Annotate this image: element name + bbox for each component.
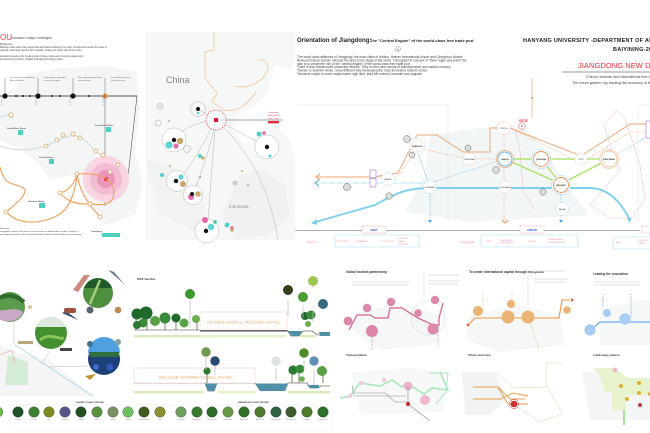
text block: description <box>297 55 467 76</box>
node: west hub <box>409 138 425 154</box>
legend: west: WEST <box>307 240 318 244</box>
timeline: Trading ports expanded <box>44 76 67 79</box>
plant labels: Arrowhead <box>139 418 149 421</box>
panel: development axis diagram: WEST <box>371 229 378 232</box>
other nodes: TUNCHANG <box>500 186 511 189</box>
legend: east: TOURISM <box>637 240 647 242</box>
axis line <box>295 230 640 232</box>
panel: development axis diagram <box>295 78 650 249</box>
photo: mangrove <box>35 317 67 349</box>
text block: intro: regional cooperation and the flow of goods, people and culture across the ocean <box>0 49 82 52</box>
plant labels: Lotus <box>32 418 36 421</box>
hub label: Jiangdong <box>268 112 279 114</box>
small clusters <box>155 103 249 232</box>
legend: east <box>613 237 650 249</box>
plant labels: Reed <box>111 419 115 421</box>
city node: east <box>255 131 279 159</box>
heading <box>297 37 474 44</box>
blue dashed routes <box>316 135 650 222</box>
legend: west: TRADE <box>398 240 406 243</box>
plant labels: Taro <box>158 418 162 421</box>
hotel box: SEASIDE INTERNATIONAL HOTEL <box>159 375 234 380</box>
heading: green: Landscape pattern <box>593 353 620 357</box>
plant labels: Aegiceras <box>240 418 248 421</box>
legend: west: INDUSTRY <box>337 241 349 243</box>
text block: footnote: Jiangdong connects the ports of the sea route to inland trade corridors, forming a <box>0 230 79 233</box>
text block: description: There is also transformed production factors. They run the new normal of transformation and capital currency. <box>297 65 451 69</box>
text block: intro: Maritime trade routes have linked Asia with Africa and Europe for many centuries and remain the basis of <box>0 46 107 49</box>
panel: urban analysis top <box>344 270 650 352</box>
label: China: China <box>166 75 190 85</box>
subtitle <box>572 75 650 85</box>
panel: development axis diagram: CENTER <box>527 229 537 232</box>
node: east hub c <box>600 150 618 168</box>
timeline: Free trade port policy <box>111 76 132 79</box>
legend: center <box>460 235 578 247</box>
node: east hub b <box>552 176 570 194</box>
green axes <box>505 159 609 184</box>
node: east hub a: QIONGHAI <box>536 158 546 161</box>
section: top <box>132 276 330 337</box>
purple gate <box>370 121 650 187</box>
arrowheads <box>311 174 632 225</box>
data callouts: South-East Route <box>95 124 114 127</box>
orange sea routes <box>0 167 114 222</box>
timeline: Sea route opened between <box>10 76 36 79</box>
map: orange <box>465 291 574 352</box>
plant labels: Xylocarpus <box>318 418 328 421</box>
legend: east: EAST <box>616 241 622 244</box>
legend: center: TRADE AND <box>500 239 513 242</box>
map: pink <box>344 296 445 350</box>
legend: west: LOGISTICS <box>382 241 394 243</box>
text block: description: Technical output to reach capital talent high land, lead the coast to innovate and upgrade. <box>297 72 423 76</box>
panel: maritime silk road map <box>0 33 143 237</box>
plant catalog heading <box>76 401 269 404</box>
panel: ecological habitat circles <box>0 270 332 430</box>
other nodes: SANYA <box>559 208 566 211</box>
hub label: Free Trade <box>268 117 279 120</box>
map: blue <box>584 294 650 345</box>
heading: panel title <box>0 33 52 42</box>
site pointer <box>519 78 533 129</box>
photo: coast wetland <box>0 292 25 322</box>
panel: regional map china and indonesia <box>146 32 295 243</box>
grey trade route <box>0 136 102 155</box>
plant labels: Cattail <box>15 418 21 421</box>
plant labels: Heritiera <box>303 418 312 421</box>
plant labels: Sonneratia <box>207 418 218 421</box>
text block: description: plan is to create the role of the "central engine" of the world-class free trade port. <box>297 62 411 66</box>
text block: description: The world-class attributes of Jiangdong, the main cities of Haikou, Hainan International Airport and Qiongzhou Harbor. <box>297 55 463 59</box>
heading: street: Urban structure <box>468 353 491 357</box>
hotel box <box>200 312 287 330</box>
orange coast route <box>205 32 268 110</box>
data callouts: South-West Route <box>7 127 27 130</box>
other nodes: DONGFANG <box>425 186 436 189</box>
blue thick axis <box>312 188 629 223</box>
land background <box>146 32 295 240</box>
section: bottom <box>134 347 330 393</box>
hotel box <box>134 368 255 383</box>
text block: footnote: new gateway between the mainland, South East Asia and the wider ocean economy <box>0 233 82 236</box>
text block: footnote <box>0 227 82 236</box>
plant labels: Rush <box>95 419 99 421</box>
node: jiangdong core <box>496 150 514 168</box>
heading: transportation: Transportation <box>346 353 367 357</box>
other nodes <box>382 122 587 216</box>
bird icons <box>18 270 126 380</box>
node: west hub: DANZHOU <box>412 145 423 148</box>
node: jiangdong core: HAIKOU <box>501 158 509 161</box>
timeline: Asia and Africa <box>10 79 25 82</box>
plant catalog heading: AQUATIC PLANT SPECIES <box>76 401 104 404</box>
plant labels: Kandelia <box>177 419 186 421</box>
hub node <box>206 110 226 130</box>
other nodes: PORT <box>578 159 584 161</box>
district boundary <box>590 111 645 218</box>
city node: south west <box>166 170 188 192</box>
heading: innovation: To create international capital through ecosystem <box>469 270 544 274</box>
trees <box>132 306 316 330</box>
legend: west: LEISURE <box>398 244 408 246</box>
data callouts <box>7 124 120 237</box>
letter markers <box>343 136 546 199</box>
text block: intro <box>0 43 107 61</box>
hub label <box>268 112 280 123</box>
land texture <box>405 122 590 222</box>
legend: center: INNOVATION <box>500 242 514 244</box>
node: east hub b: WANNING <box>556 184 566 187</box>
city node: far south <box>195 217 219 243</box>
orange main route <box>318 124 650 177</box>
legend: center: CORE <box>485 241 492 243</box>
data callouts: Central Route <box>39 156 54 159</box>
legend: west: RESEARCH <box>356 240 369 243</box>
notes <box>352 271 640 285</box>
plant labels: Excoecaria <box>286 418 297 421</box>
other nodes: NORTH <box>501 128 508 130</box>
legend: center: CENTER <box>460 240 475 244</box>
marker: A <box>397 47 399 51</box>
hub: pink rings <box>83 156 129 202</box>
data callouts: Southern Route <box>28 200 45 203</box>
timeline <box>0 76 137 105</box>
node: east hub c: WENCHANG <box>603 158 615 161</box>
heading: creative economy: Global tourism partnership <box>346 270 387 274</box>
species markers <box>185 276 328 328</box>
data callouts: Jiangdong <box>91 231 103 233</box>
text block: intro: Background <box>0 43 13 46</box>
plant labels: Pickerel <box>62 418 69 421</box>
plant labels: Sedge <box>78 419 84 421</box>
hotel box: INTERNATIONAL RESORT HOTEL <box>207 320 281 325</box>
line to hub <box>128 96 137 176</box>
other nodes: CHENGMAI <box>464 158 475 161</box>
heading: SITE Section <box>137 277 156 281</box>
plant catalog frame <box>10 405 332 430</box>
site pointer: SITE <box>519 118 528 123</box>
text block: intro: development of tourism, logistics and high technology industry <box>0 58 64 61</box>
panel: site section <box>132 276 330 393</box>
city node: west <box>162 128 186 152</box>
marker <box>396 47 400 51</box>
city node: south <box>184 186 202 204</box>
timeline: across the region <box>44 79 61 82</box>
route nodes <box>4 113 120 219</box>
text block: description: Tourism to lead the whole, novel different fully developing the most innovative tourism center. <box>297 69 428 73</box>
timeline: New shipping lanes linked <box>78 77 103 79</box>
photo: forest <box>83 278 113 308</box>
plant labels: Iris <box>48 418 50 421</box>
plant labels: Lumnitzera <box>223 418 234 421</box>
map frames <box>297 105 448 222</box>
map: transportation <box>340 368 448 421</box>
photo: lake <box>88 337 120 375</box>
heading: panel title: OU <box>0 33 12 42</box>
legend: center: FINANCE AND <box>548 238 563 241</box>
legend: center: NORTH <box>528 241 536 243</box>
legend: west <box>307 235 419 247</box>
heading: leading: Leading the innovation <box>593 272 628 276</box>
axis tags <box>362 226 650 233</box>
text block: footnote: Summary <box>0 227 10 230</box>
plant labels: Rhizophora <box>271 418 282 421</box>
other nodes: YANGPU <box>384 178 393 181</box>
legend: west: TOURISM <box>398 238 408 240</box>
label: Indonesia: Indonesia <box>229 204 249 209</box>
map background <box>0 66 143 225</box>
site plan map <box>0 320 93 396</box>
heading: The "Central Engine" of the world-class free trade port <box>370 38 474 43</box>
orange dashed route <box>318 128 650 222</box>
plant icons <box>0 407 328 417</box>
timeline: for the new era <box>111 79 126 82</box>
text block: intro: Jiangdong stands at the meeting point of these routes and of new free trade policy <box>0 55 84 58</box>
header: university and project title <box>523 38 650 85</box>
map: green <box>582 368 650 425</box>
city node: north <box>190 102 206 116</box>
plant labels: Avicennia <box>256 418 265 421</box>
timeline: east and west <box>78 79 91 82</box>
radial connection lines <box>174 109 283 240</box>
heading: Orientation of Jiangdong: <box>297 37 371 44</box>
node: east hub a <box>532 150 550 168</box>
purple gate: PORT <box>370 178 377 180</box>
panel: urban analysis bottom <box>340 353 650 425</box>
plant labels: Canna <box>125 419 132 421</box>
panel: orientation of jiangdong <box>297 37 474 76</box>
plant labels <box>15 418 328 421</box>
legend: center: INTERNATIONAL <box>548 241 566 244</box>
plant catalog heading: MANGROVE PLANT SPECIES <box>238 401 269 404</box>
hub label: New District <box>268 114 280 117</box>
text block: description: Relevant leisure tourism will lead the area to the stage of the world. Throughout in concept of "three major sea ports" the <box>297 58 467 62</box>
heading: panel title: Yamaxun unique strategies <box>11 36 52 40</box>
species markers <box>201 347 319 385</box>
legend: east: OCEAN <box>637 242 645 245</box>
trees <box>203 365 327 383</box>
plant labels: Bruguiera <box>193 418 202 421</box>
map: street <box>462 363 563 422</box>
